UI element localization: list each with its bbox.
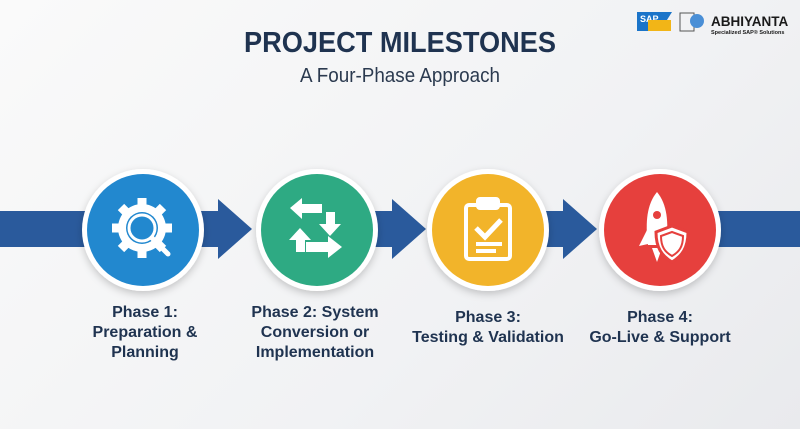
subtitle: A Four-Phase Approach [300, 65, 500, 87]
label: phase 2: Implementation [256, 344, 374, 361]
label: phase 1: Preparation & [93, 324, 198, 341]
icon: clipboard check [466, 199, 510, 259]
icon: rocket shield [639, 192, 688, 262]
icon: gear magnifier [112, 198, 172, 258]
phase 2 circle [256, 169, 378, 291]
label: phase 1: Phase 1: [112, 304, 178, 321]
logo: ABHIYANTA: Specialized SAP® Solutions [711, 29, 784, 36]
label: phase 1: Planning [111, 344, 179, 361]
icon: exchange arrows [289, 198, 342, 258]
logo: SAP partner: SAP [640, 14, 659, 24]
label: phase 2: Phase 2: System [251, 304, 379, 321]
logo: ABHIYANTA: ABHIYANTA [711, 14, 789, 29]
phase 4 circle [599, 169, 721, 291]
label: phase 3: Phase 3: [455, 309, 521, 326]
label: phase 3: Testing & Validation [412, 329, 564, 346]
labels [93, 304, 731, 361]
phase 3 circle [427, 169, 549, 291]
logo: ABHIYANTA [680, 13, 789, 36]
phase 1 circle [82, 169, 204, 291]
label: phase 4: Go-Live & Support [589, 329, 731, 346]
label: phase 2: Conversion or [261, 324, 369, 341]
timeline band [0, 199, 800, 259]
label: phase 4: Phase 4: [627, 309, 693, 326]
logo: SAP partner [637, 12, 672, 31]
title: PROJECT MILESTONES [244, 27, 556, 59]
